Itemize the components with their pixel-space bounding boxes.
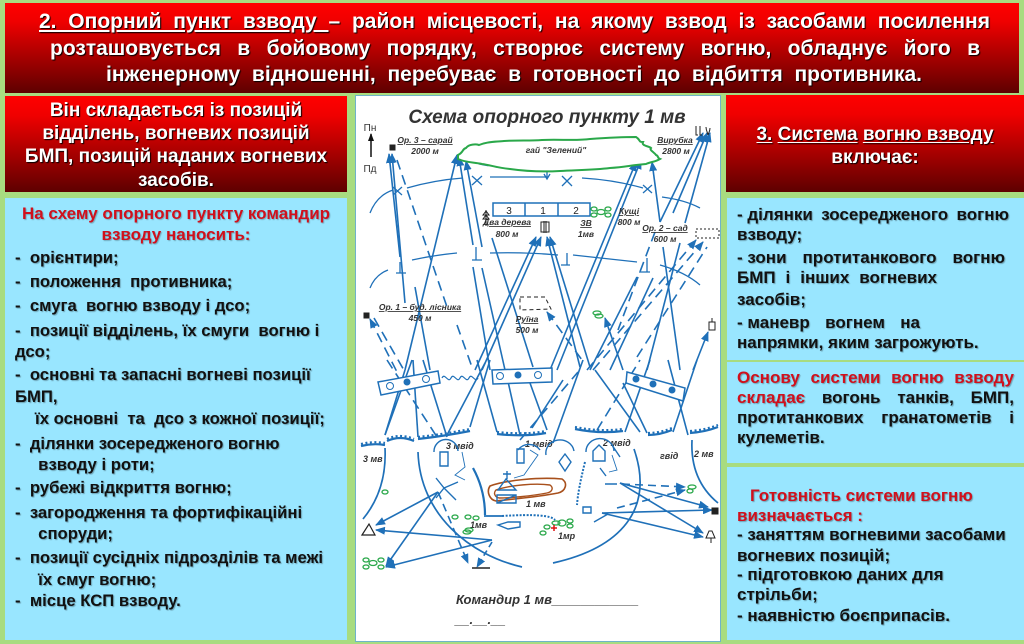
unit labels: 1мв [470,520,488,530]
solid fire lines and arrows [385,133,710,443]
dashed fire lines [370,158,707,440]
landmark labels: Два дерева [482,217,531,227]
ruin marker [520,297,551,310]
composition text: БМП, позицій наданих вогневих [25,146,327,167]
squad sector table: 3 [506,206,512,217]
list item: enemy position: - положення противника; [15,272,232,291]
landmark labels: 600 м [654,234,677,244]
north-south indicator [363,123,377,175]
unit labels: 3 мвід [446,441,474,451]
readiness item 3: - наявністю боєприпасів. [737,606,950,625]
scheme drawing [360,107,720,627]
panel: what the commander marks on the scheme [5,198,347,640]
list item: command post: - місце КСП взводу. [15,591,181,610]
list item: IFV positions: - основні та запасні вогневі позиції [15,365,311,384]
list item: platoon fire band: - смуга вогню взводу і дсо; [15,296,250,315]
list item: adjacent units: - позиції сусідніх підрозділів та межі [15,548,323,567]
component: anti-tank zones: - зони [737,248,787,267]
landmark labels [379,135,693,335]
basis line 3: протитанкових гранатометів і [737,408,1014,427]
landmark labels: 2800 м [661,146,690,156]
right fire position [626,372,685,401]
small target icons [362,126,719,543]
basis line 2: складає вогонь танків, БМП, [737,388,1014,407]
list item: adjacent units [15,548,324,590]
landmark labels: 800 м [496,229,519,239]
squad positions [434,439,620,529]
basis line 1: Основу системи вогню взводу [737,368,1014,387]
title line 3: інженерному відношенні, перебуває в готовності до відбиття противника. [106,63,922,86]
landmark labels: Ор. 1 – буд. лісника [379,302,461,312]
list item: squad positions: - позиції відділень, їх смуги вогню і [15,321,319,340]
fire system heading text [756,124,996,168]
commander signature: Командир 1 мв____________ [456,592,639,607]
flank and rear boundaries [363,440,718,567]
title line 2: розташовується в бойовому порядку, створює систему вогню, обладнує його в [50,37,980,60]
list item: IFV positions: БМП, [15,387,58,406]
unit labels: 1мр [558,531,576,541]
scheme title: Схема опорного пункту 1 мв [408,107,686,128]
unit labels: 1 мвід [525,439,553,449]
panel heading [22,204,331,245]
fire system heading text: 3. Система вогню взводу [756,124,994,145]
composition text: Він складається із позицій [50,100,302,121]
trench lines [361,425,718,520]
component: manoeuvre: вогнем на [825,313,920,332]
component: concentrated fire: зосередженого вогню [821,205,1009,224]
grove outline: гай "Зелений" [526,145,587,155]
landmark labels: 2000 м [410,146,439,156]
panel: fire system components [727,198,1024,360]
landmark labels: 800 м [618,217,641,227]
unit labels [363,438,714,541]
list item: squad positions [15,321,320,362]
list item: obstacles and fortifications: - загородження та фортифікаційні [15,503,302,522]
component: manoeuvre: - маневр [737,313,810,332]
list item: adjacent units: їх смуг вогню; [38,570,156,589]
centre fire position [492,368,552,384]
composition text: засобів. [138,170,214,191]
composition text [25,100,328,191]
readiness heading continued: визначається : [737,506,863,525]
component: anti-tank zones end: засобів; [737,290,806,309]
panel: strongpoint scheme [355,95,721,642]
panel: composition of the strongpoint [5,96,347,192]
panel: basis of the fire system [727,362,1024,463]
landmark labels: 1мв [578,229,594,239]
unit labels: 2 мв [693,449,714,459]
landmark labels: Вирубка [657,135,693,145]
basis line 4: кулеметів. [737,428,825,447]
list item: opening fire lines: - рубежі відкриття вогню; [15,478,232,497]
central command post [488,471,565,503]
squad sector table [493,203,590,217]
landmark labels: 450 м [408,313,432,323]
landmark labels: Ор. 2 – сад [642,223,688,233]
red cross marker [551,525,557,531]
list item: main and reserve sectors: їх основні та дсо з кожної позиції; [35,409,325,428]
title banner [5,3,1019,93]
north-south indicator: Пд [363,164,377,175]
panel: fire system heading [726,95,1024,192]
panel heading: На схему опорного пункту командир [22,204,330,223]
unit labels: 3 мв [363,454,383,464]
landmark labels: Ор. 3 – сарай [397,135,453,145]
component: concentrated fire [737,205,1010,225]
list item: squad positions: дсо; [15,342,50,361]
component: manoeuvre [737,313,922,333]
landmark labels: ЗВ [580,218,592,228]
rear fire arrows [376,483,712,568]
arcs of fire lines [370,170,700,288]
list item: obstacles and fortifications [15,503,302,544]
wire obstacle [442,376,478,380]
unit labels: 1 мв [526,499,546,509]
title line 1: 2. Опорний пункт взводу – район місцевості, на якому взвод із засобами посилення [39,10,990,33]
communication lines [455,450,617,480]
list item: obstacles and fortifications: споруди; [38,524,113,543]
list item: IFV positions [15,365,312,406]
landmark labels: 500 м [516,325,539,335]
component: anti-tank zones: протитанкового вогню [803,248,1005,267]
list item: landmarks: - орієнтири; [15,248,119,267]
list item: concentrated fire areas: - ділянки зосередженого вогню [15,434,279,453]
date line: __.__.__ [454,612,506,627]
landmark labels: Кущі [619,206,640,216]
readiness item 1: - заняттям вогневими засобами [737,525,1006,544]
component: concentrated fire: - ділянки [737,205,813,224]
readiness heading: Готовність системи вогню [750,486,973,505]
fire system heading text: включає: [831,147,919,168]
readiness item 1 continued: вогневих позицій; [737,546,890,565]
component: anti-tank zones continued: БМП і інших вогневих [737,268,937,287]
squad sector table: 1 [540,206,546,217]
list item: concentrated fire areas: взводу і роти; [38,455,155,474]
cross and tick marks [393,176,652,273]
grove outline [458,137,660,171]
panel heading: взводу наносить: [102,225,250,244]
north-south indicator: Пн [364,123,376,134]
green vegetation symbols [363,207,696,569]
squad sector table: 2 [573,206,579,217]
component: manoeuvre continued: напрямки, яким загрожують. [737,333,979,352]
left fire position [378,371,440,395]
readiness item 2 continued: стрільби; [737,585,818,604]
unit labels: 2 мвід [602,438,631,448]
list item: concentrated fire areas [15,434,280,475]
composition text: відділень, вогневих позицій [42,123,310,144]
component: concentrated fire continued: взводу; [737,225,802,244]
readiness item 2: - підготовкою даних для [737,565,943,584]
landmark labels: Руїна [516,314,539,324]
panel: fire system readiness [727,467,1024,640]
unit labels: гвід [660,451,679,461]
